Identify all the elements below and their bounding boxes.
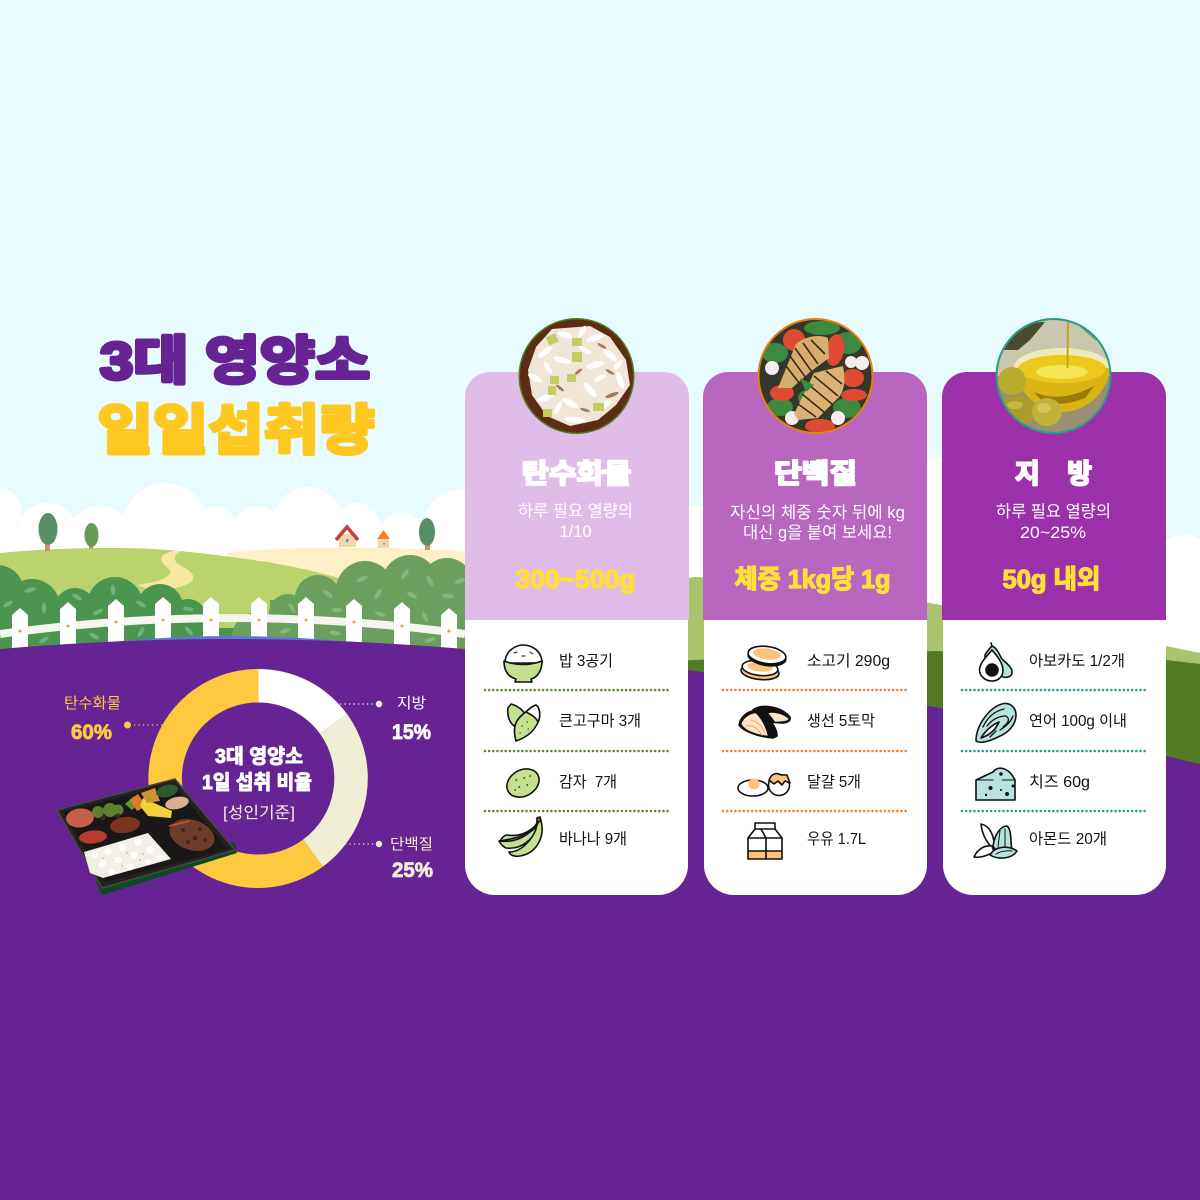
food list [485,645,670,856]
title [98,333,374,461]
houses [336,527,390,548]
bush leaves [2,584,194,645]
card: carbohydrate [465,316,689,895]
green hill [0,548,345,650]
icon: avocado [980,643,1012,681]
card body [465,620,688,895]
card amount: 50g 내외 [1002,564,1100,594]
item text: 감자 7개 [559,773,617,791]
title line 1: 3대 영양소 [100,333,370,391]
card description: 하루 필요 열량의 [518,502,633,520]
label: protein [345,836,433,882]
divider [485,750,670,752]
label: fat: 지방 [397,695,426,712]
card description [996,502,1111,542]
icon: milk carton [748,823,782,859]
item text: 바나나 9개 [559,830,627,848]
card description [730,503,905,542]
label: protein: 25% [392,859,433,882]
chart centre text: 3대 영양소 [215,745,303,768]
bushes right [232,555,473,662]
item text: 치즈 60g [1029,773,1090,791]
donut chart [64,669,433,888]
photo: rice bowl [516,316,638,438]
divider [962,810,1147,812]
divider [485,689,670,691]
card amount: 300~500g [516,564,636,594]
item text: 생선 5토막 [807,712,875,730]
item text: 큰고구마 3개 [559,712,641,730]
divider [723,750,908,752]
label: carbohydrate: 60% [71,721,112,744]
fence [0,597,465,650]
icon: sweet potato [508,704,540,741]
card header [465,372,689,620]
icon: cheese [976,768,1015,800]
lunch box tray [57,779,237,895]
card title: 탄수화물 [522,459,632,489]
label: fat [340,695,431,744]
segment: protein 25% [303,714,368,867]
food list [962,643,1147,858]
infographic [0,318,1200,1200]
purple ground [0,639,1200,1200]
label: carbohydrate [64,695,163,744]
card description: 대신 g을 붙여 보세요! [743,523,892,542]
item text: 연어 100g 이내 [1029,712,1127,730]
card: fat [942,316,1166,895]
label: fat: 15% [392,721,431,744]
card title: 지 방 [1015,459,1092,489]
card description: 1/10 [559,523,592,541]
segment: fat 15% [258,669,347,734]
label: carbohydrate: 탄수화물 [64,695,121,712]
card header [942,372,1166,620]
icon: fish fillets [739,706,790,738]
chart centre text: 1일 섭취 비율 [202,771,312,794]
card description: 하루 필요 열량의 [996,502,1111,521]
divider [723,689,908,691]
icon: eggs [738,774,790,796]
divider [723,810,908,812]
icon: rice bowl [504,645,542,682]
segment: carbohydrate 60% [148,669,323,888]
card body [943,620,1166,895]
title line 2: 일일섭취량 [98,401,374,461]
item text: 밥 3공기 [559,652,613,670]
photo: grilled chicken salad [755,316,877,438]
card: protein [703,316,927,895]
card body [704,620,927,895]
icon: salmon [976,703,1016,742]
item text: 달걀 5개 [807,773,861,791]
chart centre text [202,745,312,822]
label: protein: 단백질 [390,836,433,853]
bushes left [0,565,260,655]
icon: almonds [974,824,1017,858]
trees [38,513,435,551]
far right hills [465,577,1200,800]
icon: potato [502,763,544,803]
item text: 소고기 290g [807,652,890,670]
divider [962,689,1147,691]
chart centre text: [성인기준] [223,804,295,822]
card header [703,372,927,620]
blue arc [75,636,390,646]
icon: beef [740,644,787,681]
food list [723,644,908,859]
item text: 우유 1.7L [807,831,866,848]
landscape scene [0,458,1200,1200]
item text: 아보카도 1/2개 [1029,652,1125,670]
clouds [0,458,1200,665]
photo: olive oil [994,316,1114,438]
card description: 자신의 체중 숫자 뒤에 kg [730,503,905,522]
card amount: 체중 1kg당 1g [734,564,890,594]
card title: 단백질 [774,459,857,489]
cream hill [227,548,470,650]
card description: 20~25% [1020,524,1086,542]
card description [518,502,633,541]
item text: 아몬드 20개 [1029,830,1107,848]
divider [485,810,670,812]
divider [962,750,1147,752]
icon: banana [499,817,542,856]
winding road [137,551,193,592]
